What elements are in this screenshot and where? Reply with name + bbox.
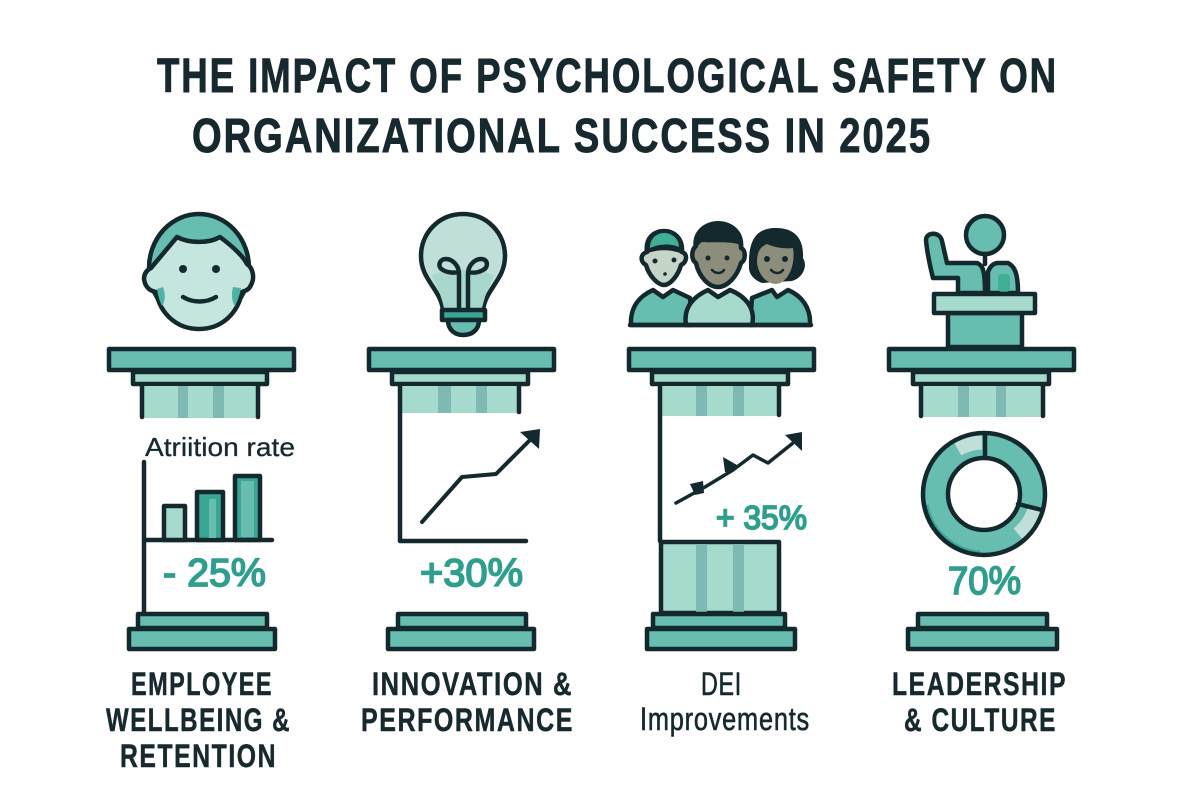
base	[129, 614, 275, 649]
capital	[889, 349, 1074, 417]
donut chart	[923, 433, 1045, 555]
label: EMPLOYEE	[131, 666, 273, 702]
value: +30%	[420, 552, 523, 595]
trend arrow	[676, 432, 802, 503]
value: 70%	[948, 560, 1021, 603]
label: & CULTURE	[904, 702, 1057, 738]
capital	[369, 349, 554, 413]
lower column	[661, 542, 779, 613]
label: INNOVATION &	[372, 666, 573, 702]
panel: leadership and culture	[889, 216, 1074, 738]
value: - 25%	[163, 552, 266, 595]
title: ORGANIZATIONAL SUCCESS IN 2025	[192, 110, 932, 163]
panel: innovation and performance	[361, 214, 574, 738]
value: + 35%	[716, 499, 807, 536]
label: RETENTION	[120, 738, 277, 774]
base	[388, 614, 534, 649]
label: WELLBEING &	[106, 702, 291, 738]
label	[361, 666, 574, 738]
base	[647, 614, 795, 649]
label	[892, 666, 1067, 738]
label: DEI	[701, 666, 742, 702]
label: PERFORMANCE	[361, 702, 574, 738]
capital	[629, 349, 814, 541]
panel: employee wellbeing and retention	[106, 214, 295, 774]
label	[640, 666, 810, 737]
label: LEADERSHIP	[892, 666, 1067, 702]
bar chart	[144, 462, 272, 613]
icon: smiling face	[144, 214, 253, 329]
panel: DEI improvements	[629, 221, 814, 737]
label	[106, 666, 291, 774]
chart label: Atriition rate	[145, 432, 295, 462]
title	[157, 50, 1058, 163]
capital	[109, 349, 294, 418]
base	[908, 614, 1057, 649]
icon: speaker at podium	[926, 216, 1035, 347]
label: Improvements	[640, 701, 810, 737]
icon: light bulb	[421, 214, 505, 335]
icon: three people	[630, 221, 811, 325]
line chart with arrow	[400, 386, 540, 541]
